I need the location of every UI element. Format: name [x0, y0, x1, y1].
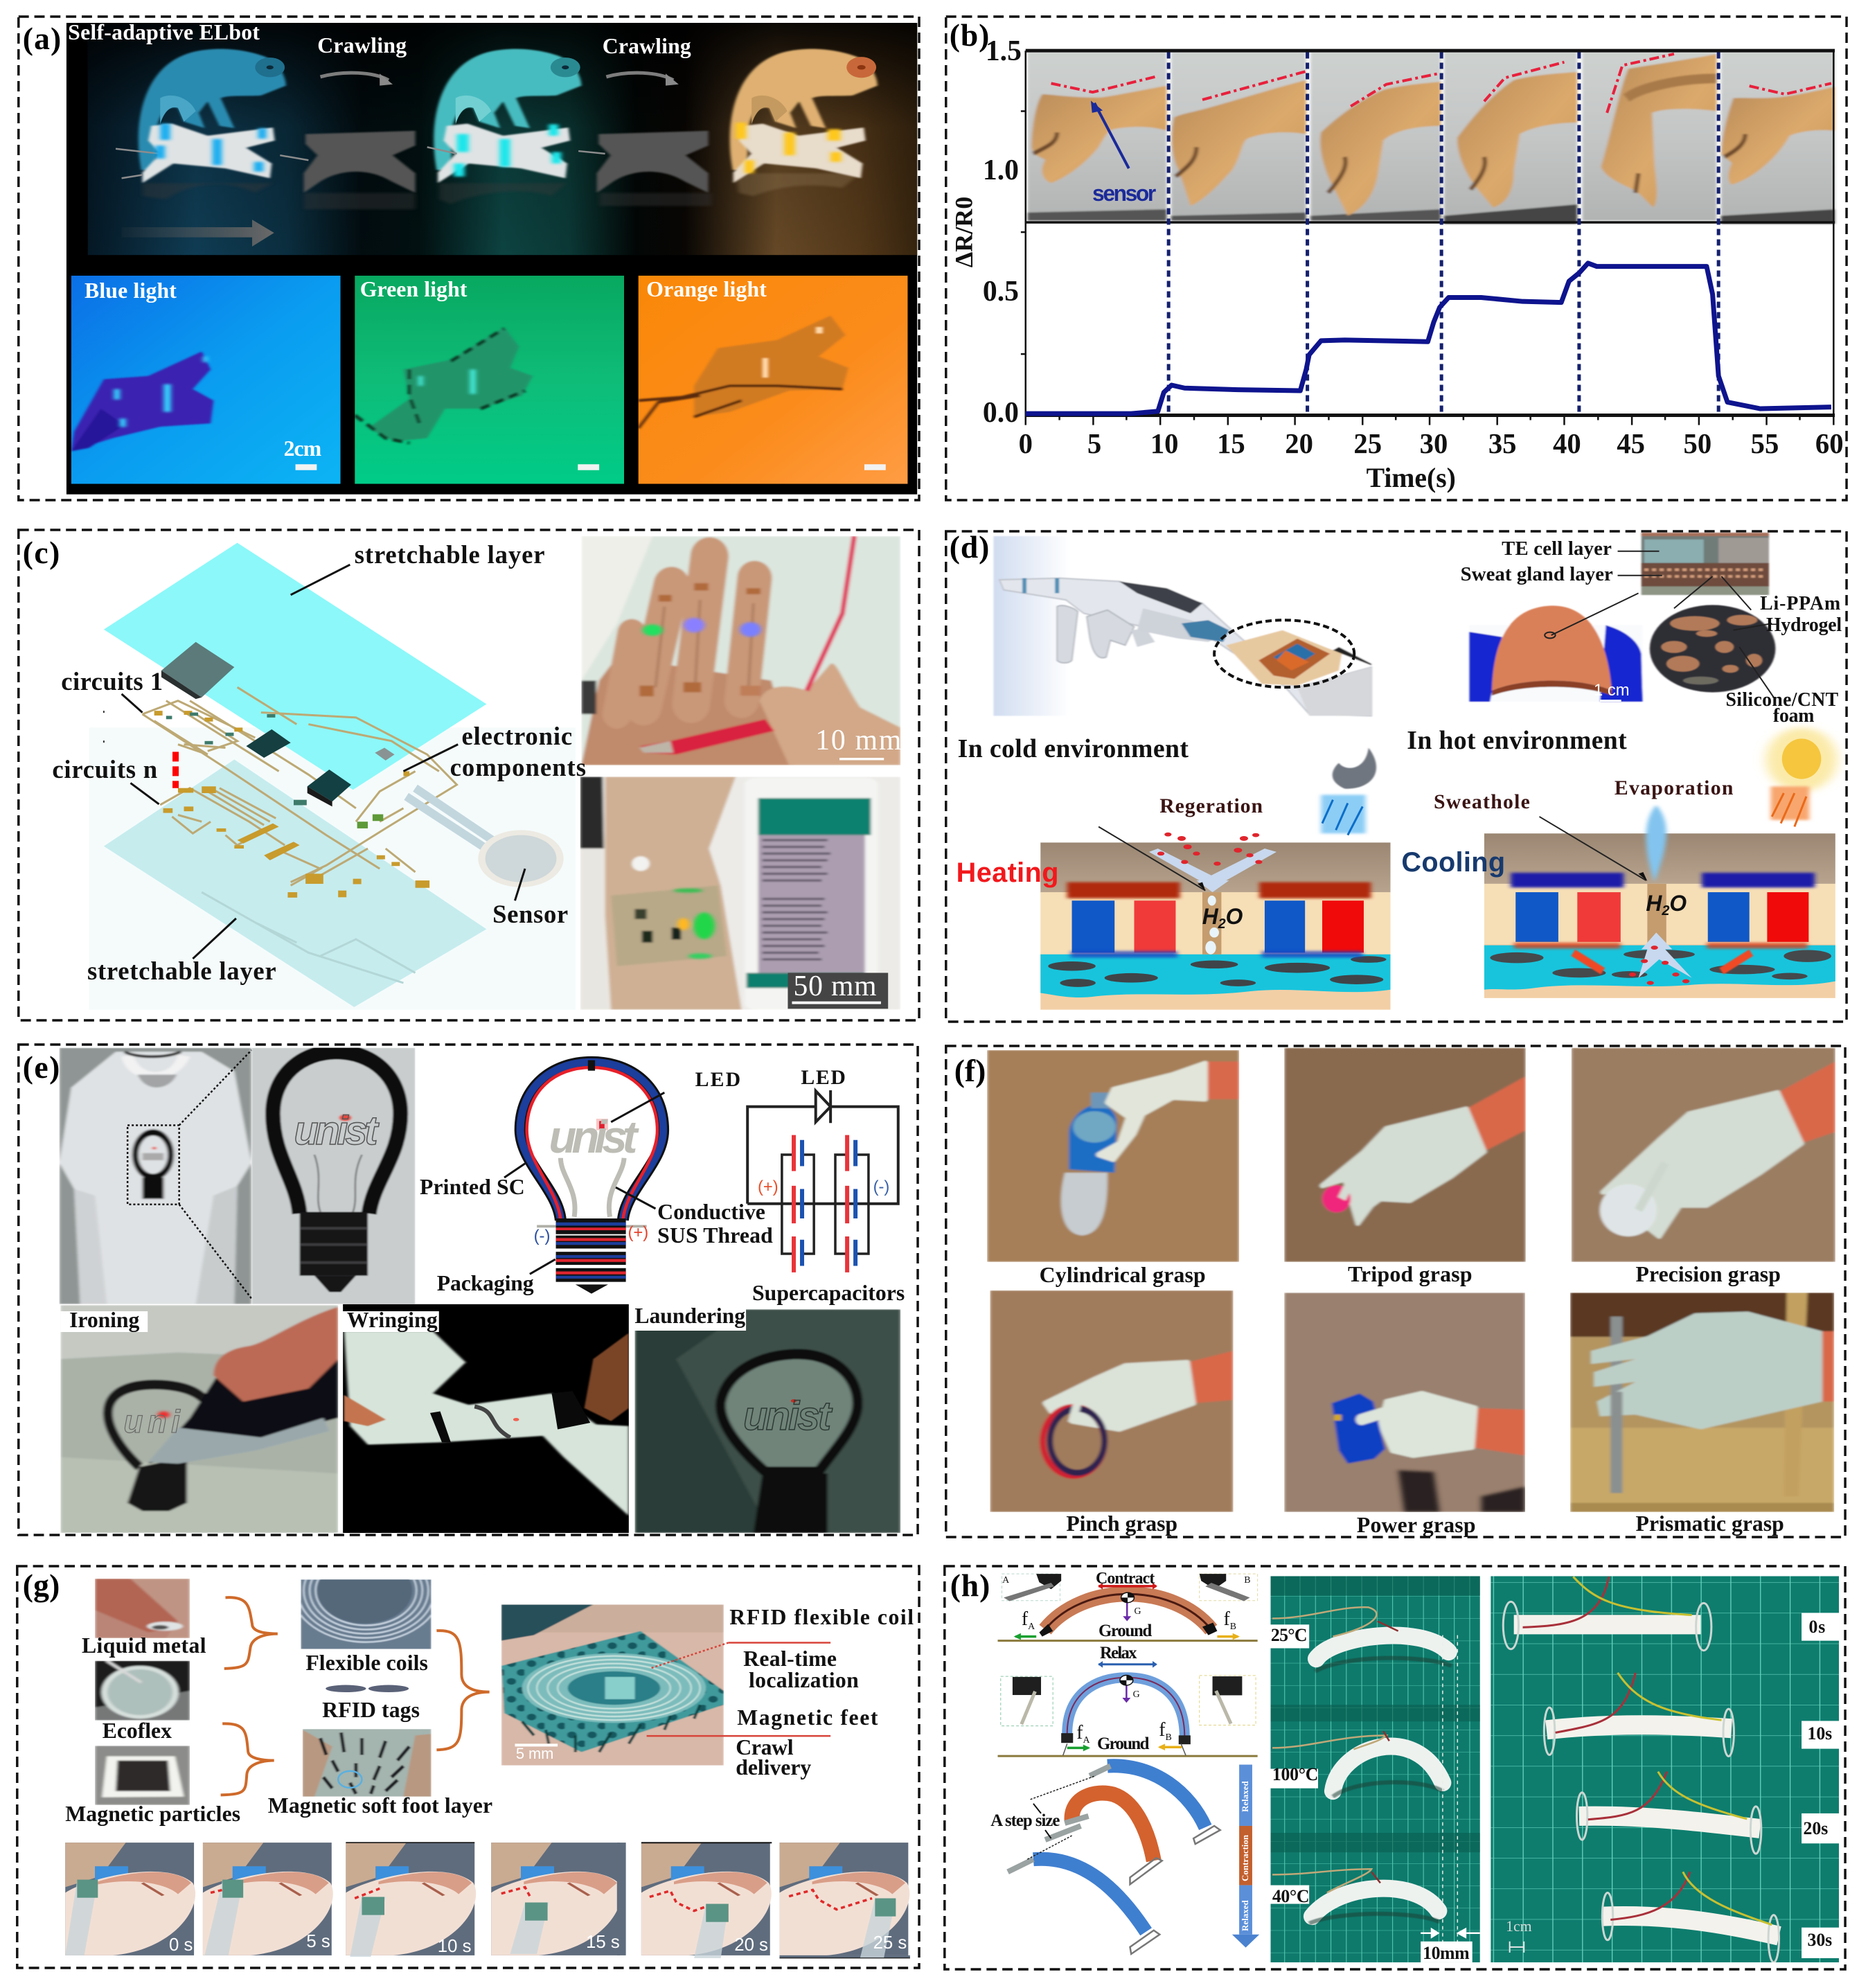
hot schematic [1484, 833, 1835, 998]
circuit polarity minus: (-) [873, 1178, 889, 1196]
top cyan layer [104, 543, 486, 790]
sensor pad [407, 788, 492, 847]
label: crawling 1: Crawling [317, 33, 407, 57]
photo: pinch grasp [990, 1290, 1233, 1512]
photo: cylindrical grasp [987, 1050, 1240, 1262]
red sensor traces [1051, 54, 1831, 113]
photo: assembled crawler [501, 1604, 724, 1766]
photo: ecoflex [95, 1661, 190, 1721]
bulb polarity minus: (-) [534, 1227, 550, 1245]
x axis tick labels: 30 [1420, 428, 1448, 459]
big direction arrow [122, 220, 274, 247]
label relax: Relax [1100, 1644, 1137, 1662]
panel a border [19, 17, 919, 500]
cold heat bars [1067, 882, 1371, 898]
photo: tripod grasp [1284, 1047, 1526, 1262]
label: silicone CNT: Silicone/CNT [1725, 689, 1839, 711]
label: evaporation: Evaporation [1615, 776, 1734, 799]
hot cooling bars [1511, 873, 1815, 887]
diagram leader arrows [504, 1092, 664, 1274]
heading: cold environment: In cold environment [958, 734, 1189, 763]
frame 15 s [491, 1843, 626, 1955]
force label fA lower: A [1083, 1735, 1090, 1746]
white time label boxes [1802, 1613, 1839, 1958]
label: H2O cold: 2 [1218, 916, 1226, 932]
caption laundering: Laundering [634, 1304, 745, 1328]
label: liquid metal: Liquid metal [82, 1633, 206, 1658]
panel h: crawling actuator [945, 1566, 1845, 1969]
frame 0 s [65, 1843, 195, 1955]
circuit traces [143, 687, 457, 885]
label: foam: foam [1773, 705, 1814, 727]
panel f: robotic hand grasps [946, 1046, 1845, 1537]
label: stretchable layer bottom: stretchable layer [87, 957, 276, 985]
panel label h: (h) [950, 1568, 990, 1603]
response curve [1026, 263, 1831, 414]
label: H2O cold: O [1226, 904, 1243, 929]
photo: laundering [634, 1309, 900, 1534]
chameleon blue [139, 49, 286, 170]
motion arrows [321, 73, 389, 80]
label: sensor: Sensor [492, 900, 568, 928]
label: RFID tags: RFID tags [322, 1698, 420, 1722]
photo: precision grasp [1571, 1047, 1835, 1262]
x axis tick labels: 60 [1815, 428, 1844, 459]
scale 1 cm: 1 cm [1594, 681, 1630, 700]
heading: hot environment: In hot environment [1407, 726, 1627, 755]
label: RFID flexible coil: RFID flexible coil [729, 1605, 914, 1629]
time-lapse frames [65, 1842, 910, 1958]
bulb polarity plus: (+) [628, 1223, 648, 1242]
force label fB lower: B [1166, 1732, 1172, 1743]
strip 20s [1576, 1772, 1761, 1854]
panel g border [17, 1566, 919, 1968]
photo: zoomed bulb print [251, 1047, 416, 1304]
panel b border [946, 17, 1847, 500]
orange curved skin sample [1469, 605, 1643, 702]
panel e: printed supercapacitor t-shirt [19, 1045, 918, 1535]
sensor label: sensor [1092, 181, 1156, 206]
caption precision: Precision grasp [1636, 1262, 1781, 1286]
photo: t-shirt with bulb print [60, 1047, 252, 1304]
circuit polarity plus: (+) [758, 1178, 779, 1196]
panel h border [945, 1566, 1845, 1969]
cold regeneration arrows [1149, 849, 1277, 892]
label 10mm: 10mm [1423, 1943, 1470, 1963]
leader lines [122, 565, 525, 959]
time labels: 5 s [306, 1932, 330, 1951]
label B top: B [1244, 1575, 1250, 1586]
caption cylindrical: Cylindrical grasp [1040, 1263, 1206, 1287]
vertical red dots [172, 752, 179, 788]
photo: wrist patch and phone [580, 776, 900, 1010]
relax diagram [997, 1661, 1258, 1756]
frame 25 s [779, 1843, 910, 1958]
phase bar arrow [1232, 1765, 1259, 1948]
label: hydrogel: Hydrogel [1766, 614, 1842, 636]
scale 5 mm: 5 mm [516, 1745, 553, 1762]
label: blue light: Blue light [84, 278, 177, 303]
hot rays [1771, 786, 1809, 826]
orange braces [221, 1597, 490, 1795]
label a step size: A step size [990, 1811, 1060, 1830]
cross-section micrograph [1642, 533, 1769, 595]
label 20s: 20s [1804, 1818, 1828, 1838]
cold sweat channel [1202, 892, 1221, 955]
photo: magnetic particles [95, 1746, 190, 1805]
supercapacitor circuit [747, 1090, 898, 1272]
bottom layer [104, 759, 486, 1007]
exploded layer diagram [89, 543, 576, 1010]
label: Printed SC: Printed SC [420, 1175, 525, 1199]
time labels: 20 s [734, 1935, 768, 1955]
time labels: 0 s [169, 1935, 193, 1955]
label: cooling: Cooling [1401, 847, 1505, 878]
time labels: 15 s [586, 1933, 620, 1952]
cold schematic [1040, 842, 1391, 1010]
contract diagram [997, 1574, 1258, 1641]
x axis tick labels: 5 [1087, 428, 1101, 459]
x axis tick labels: 55 [1751, 428, 1779, 459]
label: TE cell layer: TE cell layer [1502, 538, 1612, 560]
green light photo [355, 276, 624, 483]
x axis tick labels: 15 [1217, 428, 1245, 459]
sensor pointer arrow [1094, 103, 1129, 168]
label: orange light: Orange light [646, 277, 767, 301]
photo: prismatic grasp [1570, 1293, 1834, 1512]
panel d border [946, 531, 1847, 1022]
chart axes [1026, 49, 1835, 53]
panel label a: (a) [23, 21, 61, 56]
scale label 2cm: 2cm [284, 436, 321, 461]
label 1cm: 1cm [1506, 1917, 1532, 1935]
panel c: stretchable multilayer circuits [19, 530, 919, 1020]
RFID tag glyph [326, 1685, 409, 1692]
label: stretchable layer top: stretchable layer [355, 540, 544, 569]
photo block: crawling chameleon robots [66, 23, 917, 495]
panel a: self-adaptive ELbot [19, 17, 919, 500]
label 10s: 10s [1808, 1723, 1832, 1743]
time-lapse grid photo [1491, 1576, 1839, 1962]
x axis tick labels: 50 [1683, 428, 1711, 459]
label: delivery: delivery [736, 1755, 811, 1780]
label: Li-PPAm: Li-PPAm [1760, 593, 1840, 614]
dotted zoom frame [127, 1126, 179, 1205]
chameleon orange [730, 49, 878, 170]
strip 0s [1503, 1577, 1711, 1651]
label: localization: localization [749, 1668, 859, 1692]
label: regeration: Regeration [1159, 795, 1263, 817]
wrist photo strip [1027, 53, 1835, 224]
y axis tick labels: 1.5 [986, 35, 1022, 67]
label: electronic: electronic [461, 722, 572, 750]
x axis title: Time(s) [1367, 463, 1456, 493]
label: circuits n: circuits n [52, 755, 157, 783]
panel label g: (g) [23, 1568, 60, 1603]
label: crawling 2: Crawling [603, 34, 691, 58]
photo: power grasp [1284, 1293, 1525, 1512]
caption prismatic: Prismatic grasp [1636, 1511, 1784, 1536]
label: packaging: Packaging [437, 1271, 534, 1295]
photo: wringing [343, 1304, 629, 1534]
panel e border [19, 1045, 918, 1535]
label: H2O cold: H [1202, 904, 1218, 929]
bar label relaxed bottom: Relaxed [1240, 1899, 1250, 1931]
force label fA lower: f [1076, 1722, 1083, 1743]
y axis tick labels [983, 35, 1022, 429]
step sequence arcs [1008, 1766, 1220, 1954]
x axis tick labels: 0 [1019, 428, 1033, 459]
caption pinch: Pinch grasp [1066, 1511, 1177, 1536]
robot hand [993, 536, 1373, 716]
panel label d: (d) [950, 529, 989, 565]
caption tripod: Tripod grasp [1348, 1262, 1473, 1286]
cold rays [1321, 795, 1366, 835]
ironing print word: uni [124, 1404, 181, 1439]
laundering print word: unist [743, 1394, 833, 1439]
callout lines [647, 1642, 830, 1736]
label: circuits 1: circuits 1 [61, 667, 163, 695]
robots white [143, 123, 570, 183]
label: magnetic feet: Magnetic feet [737, 1705, 878, 1730]
bar label relaxed top: Relaxed [1240, 1780, 1250, 1812]
strip 10s [1544, 1673, 1734, 1756]
frame 10 s [346, 1842, 476, 1957]
crawling robots grey [304, 131, 709, 193]
label 40C: 40°C [1272, 1886, 1309, 1906]
y axis tick labels: 1.0 [983, 154, 1019, 186]
label A top: A [1002, 1575, 1009, 1586]
IC chips [161, 642, 234, 698]
label 0s: 0s [1808, 1617, 1825, 1637]
white temperature label boxes [1270, 1624, 1473, 1962]
vertical dashed dividers [1168, 53, 1718, 414]
time labels: 25 s [873, 1933, 907, 1953]
time labels: 10 s [438, 1937, 471, 1956]
wrist photos and chart [1021, 51, 1835, 425]
panel c border [19, 530, 919, 1020]
x axis tick labels: 25 [1353, 428, 1382, 459]
caption wringing: Wringing [347, 1308, 438, 1332]
scale bars [296, 464, 886, 470]
x axis tick labels: 20 [1285, 428, 1313, 459]
x axis tick labels: 45 [1617, 428, 1645, 459]
label: sweathole: Sweathole [1434, 790, 1530, 813]
panel d: thermoelectric sweat skin [946, 529, 1847, 1022]
faint traces lower layer [202, 892, 416, 983]
label ground 1: Ground [1098, 1622, 1152, 1640]
force label fA top: A [1028, 1622, 1035, 1632]
panel g: RFID magnetic crawler [17, 1539, 919, 1968]
hot thermoelectric legs [1515, 892, 1558, 942]
label: components: components [450, 753, 586, 781]
caption ironing: Ironing [69, 1308, 139, 1332]
y axis tick labels: 0.5 [983, 276, 1019, 308]
gravity label lower: G [1133, 1689, 1140, 1700]
photo: flexible coils [301, 1579, 432, 1649]
chameleon teal [434, 49, 581, 170]
panel label f: (f) [954, 1053, 986, 1088]
sun icon [1766, 727, 1837, 792]
photo: magnetic foot layer [302, 1729, 432, 1797]
label: LED bulb: LED [695, 1068, 740, 1091]
heading: Self-adaptive ELbot: Self-adaptive ELbot [68, 20, 260, 44]
panel b: wrist sensor response [946, 17, 1847, 500]
photo: LEDs on fingers [581, 536, 900, 765]
bulb logo text: unist [549, 1112, 639, 1162]
label ground 2: Ground [1097, 1734, 1150, 1753]
panel label b: (b) [950, 17, 989, 53]
label: flexible coils: Flexible coils [305, 1651, 428, 1675]
strip 30s [1602, 1872, 1779, 1962]
x axis tick labels: 35 [1488, 428, 1516, 459]
frame 20 s [641, 1842, 772, 1958]
axis ticks [1021, 111, 1833, 425]
label: supercapacitors: Supercapacitors [752, 1281, 905, 1305]
y axis title: ΔR/R0 [950, 197, 977, 267]
label: H2O hot: H [1646, 891, 1662, 916]
dashed inset circle [1214, 620, 1354, 687]
orange light photo [639, 276, 907, 483]
y axis tick labels: 0.0 [983, 397, 1019, 429]
label: crawl: Crawl [736, 1735, 794, 1759]
x axis tick labels [1019, 428, 1844, 459]
photo: liquid metal [95, 1579, 190, 1638]
label: heating: Heating [957, 858, 1058, 888]
sample leader lines [1551, 551, 1775, 699]
gravity label top: G [1135, 1606, 1141, 1617]
label contract: Contract [1096, 1570, 1155, 1588]
panel label e: (e) [23, 1049, 60, 1085]
force label fB top: B [1230, 1622, 1236, 1632]
label: H2O hot: O [1669, 891, 1687, 916]
hot sweat channel [1647, 884, 1666, 946]
x axis tick labels: 40 [1553, 428, 1581, 459]
frame 5 s [203, 1843, 333, 1955]
label: green light: Green light [360, 277, 468, 301]
force label fA top: f [1022, 1608, 1028, 1630]
moon icon [1333, 748, 1376, 789]
cold thermoelectric legs [1072, 900, 1114, 952]
scale 10 mm: 10 mm [815, 725, 901, 756]
shirt print word: unist [294, 1109, 380, 1153]
label: sweat gland layer: Sweat gland layer [1461, 563, 1613, 585]
label: SUS thread: SUS Thread [657, 1223, 773, 1248]
x axis tick labels: 10 [1150, 428, 1179, 459]
label: conductive: Conductive [657, 1200, 765, 1224]
scale 50 mm: 50 mm [794, 970, 877, 1002]
force label fB top: f [1223, 1608, 1230, 1630]
blue light photo [71, 276, 341, 483]
force label fB lower: f [1159, 1719, 1166, 1741]
caption power: Power grasp [1357, 1513, 1475, 1537]
panel label c: (c) [23, 535, 60, 570]
solder pads [154, 711, 429, 898]
panel f border [946, 1046, 1845, 1537]
label: ecoflex: Ecoflex [103, 1719, 172, 1743]
label 30s: 30s [1808, 1930, 1832, 1950]
bar label contraction: Contraction [1240, 1835, 1250, 1881]
time labels [169, 1932, 907, 1956]
label 25C: 25°C [1271, 1625, 1307, 1645]
bulb diagram [520, 1060, 664, 1294]
label: real-time: Real-time [743, 1647, 837, 1671]
heat flow arrows [1573, 952, 1751, 971]
label: H2O hot: 2 [1661, 903, 1669, 918]
magnified foam circle [1650, 605, 1775, 692]
label: magnetic soft foot layer: Magnetic soft foot layer [268, 1793, 492, 1818]
LEDs [155, 123, 267, 172]
label 100C: 100°C [1272, 1764, 1318, 1784]
grid photo with temperatures [1270, 1576, 1480, 1962]
green components [357, 815, 383, 828]
label: LED circuit: LED [801, 1066, 846, 1089]
label: magnetic particles: Magnetic particles [65, 1802, 240, 1826]
photo: ironing [60, 1305, 338, 1534]
